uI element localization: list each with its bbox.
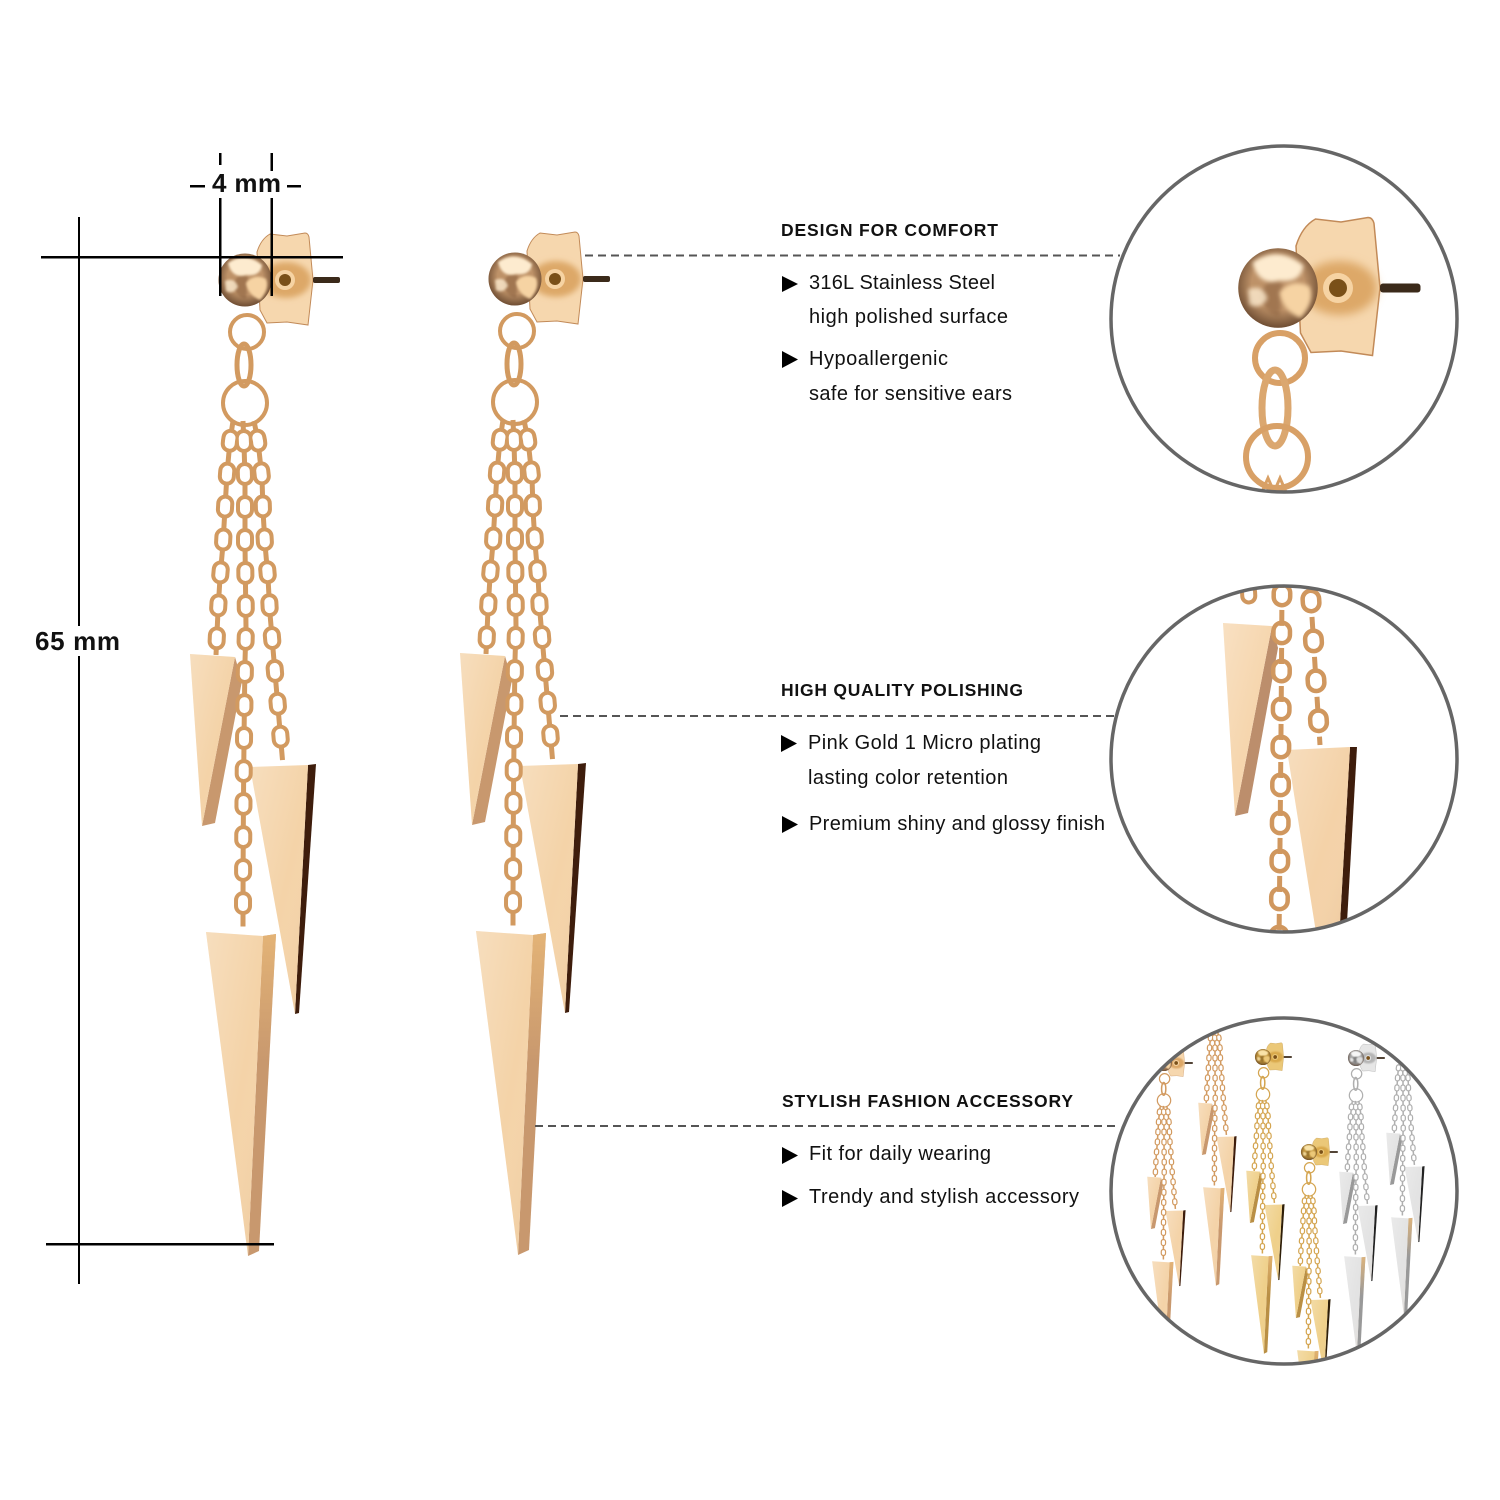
- circle: stud detail: [1111, 146, 1457, 492]
- six small earrings: [1122, 1016, 1425, 1366]
- text block: high quality polishing: HIGH QUALITY POLISHING: [781, 680, 1023, 700]
- text block: design for comfort: DESIGN FOR COMFORT: [781, 220, 998, 240]
- text block: design for comfort: 316L Stainless Steel: [809, 272, 995, 294]
- earring: left measured: [190, 233, 340, 1256]
- left earring with dimensions: [190, 233, 340, 1256]
- callout line: accessory: [535, 1125, 1115, 1127]
- text block: stylish fashion accessory: Fit for daily wearing: [809, 1143, 991, 1165]
- text block: design for comfort: [781, 220, 1012, 405]
- callout line: comfort: [585, 254, 1120, 256]
- circle: colour variations: [1109, 1016, 1459, 1366]
- circle: polish detail: [1111, 580, 1457, 945]
- dimension: width 4 mm: 4 mm: [212, 168, 281, 198]
- middle earring: [460, 232, 610, 1255]
- text block: design for comfort: Hypoallergenic: [809, 348, 948, 370]
- zoomed spikes and chains: [1223, 580, 1357, 945]
- zoomed stud and rings: [1238, 218, 1420, 492]
- callout line: polishing: [560, 715, 1115, 717]
- text block: design for comfort: high polished surface: [809, 306, 1008, 328]
- text block: stylish fashion accessory: [782, 1091, 1079, 1208]
- dimension: height 65 mm: 65 mm: [35, 626, 120, 656]
- text block: high quality polishing: Pink Gold 1 Micro plating: [808, 732, 1041, 754]
- text block: high quality polishing: Premium shiny and glossy finish: [809, 813, 1105, 835]
- dimension: height 65 mm: [33, 217, 343, 1284]
- text block: high quality polishing: [781, 680, 1105, 835]
- text block: stylish fashion accessory: Trendy and stylish accessory: [809, 1186, 1079, 1208]
- text block: stylish fashion accessory: STYLISH FASHION ACCESSORY: [782, 1091, 1073, 1111]
- text block: high quality polishing: lasting color retention: [808, 767, 1008, 789]
- earring: centre product: [460, 232, 610, 1255]
- text block: design for comfort: safe for sensitive ears: [809, 383, 1012, 405]
